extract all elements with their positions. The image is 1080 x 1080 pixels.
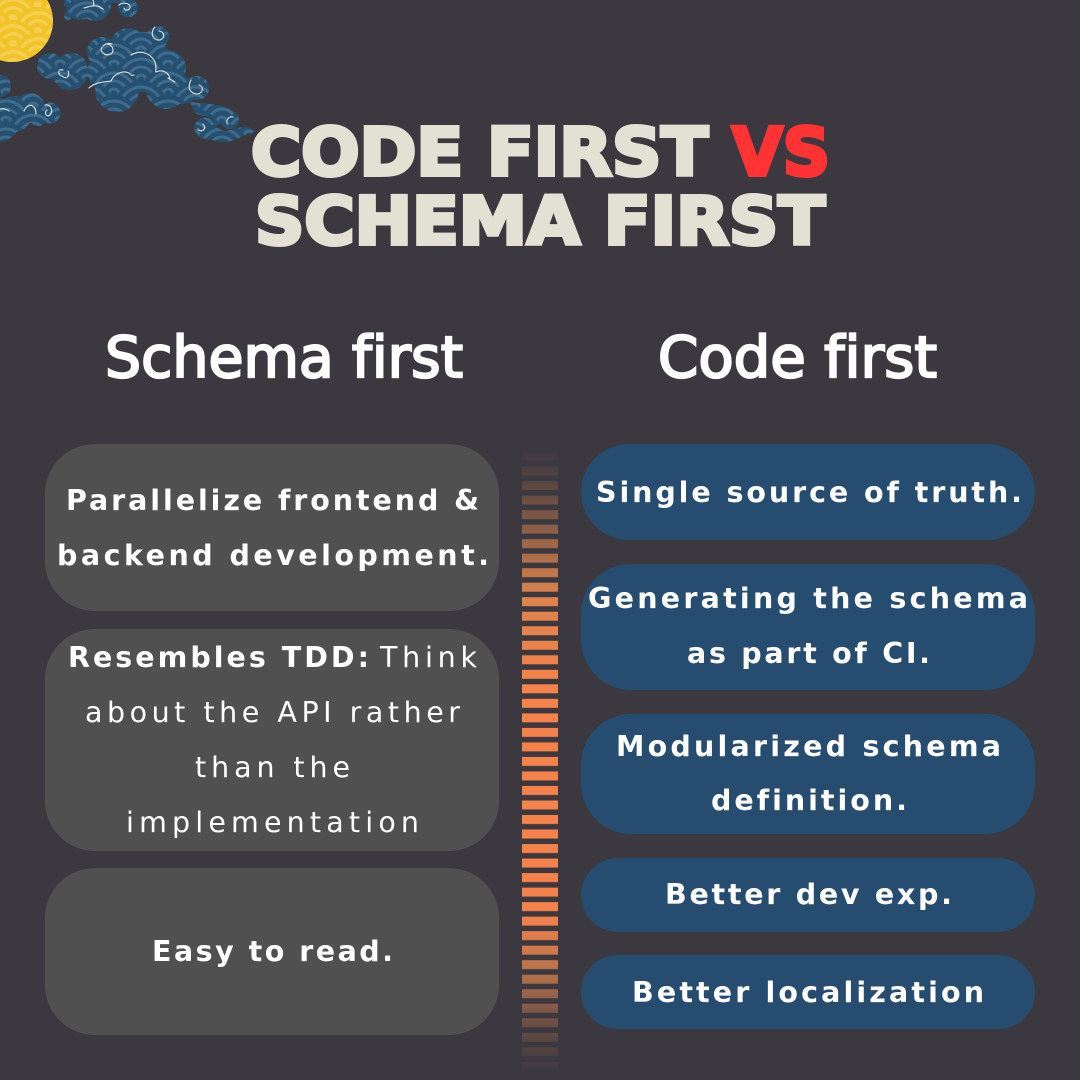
pill: easy to read xyxy=(45,868,499,1035)
title line 2: SCHEMA FIRST xyxy=(255,183,825,260)
pill: better dev exp xyxy=(581,858,1035,932)
pill: resembles TDD: Resembles TDD: xyxy=(68,641,369,674)
pill: single source of truth: Single source of truth. xyxy=(596,476,1022,509)
divider: fading orange bars xyxy=(522,437,558,1077)
pill: resembles TDD: about the API rather xyxy=(85,696,460,729)
icon: yellow moon xyxy=(0,0,53,62)
icon: main cloud xyxy=(37,26,256,142)
pill: better localization xyxy=(581,955,1035,1029)
heading: schema first: Schema first xyxy=(105,325,463,391)
title accent: VS: VS xyxy=(732,114,830,191)
pill: modularized schema xyxy=(581,714,1035,834)
pill: generating the schema: as part of CI. xyxy=(687,637,930,670)
pill: resembles TDD: implementation xyxy=(126,806,419,839)
pill: resembles TDD: Think xyxy=(379,641,477,674)
pill: better dev exp: Better dev exp. xyxy=(665,878,952,911)
pill: easy to read: Easy to read. xyxy=(152,935,393,968)
pill: resembles TDD: than the xyxy=(195,751,350,784)
pill: parallelize: Parallelize frontend & xyxy=(66,484,479,517)
icon: top cloud xyxy=(64,0,138,21)
pill: parallelize xyxy=(45,444,499,611)
pill: single source of truth xyxy=(581,444,1035,540)
pill: generating the schema xyxy=(581,564,1035,690)
icon: left cloud xyxy=(0,75,60,142)
title line 1: CODE FIRST xyxy=(251,114,708,191)
panel: schema first items xyxy=(45,444,499,1035)
title xyxy=(251,114,830,260)
pill: parallelize: backend development. xyxy=(57,539,489,572)
panel: code first items xyxy=(581,444,1035,1029)
pill: modularized schema: definition. xyxy=(711,784,907,817)
pill: resembles TDD xyxy=(45,629,499,851)
pill: modularized schema: Modularized schema xyxy=(616,730,1001,763)
clouds decoration xyxy=(0,0,256,142)
pill: better localization: Better localization xyxy=(632,976,984,1009)
pill: generating the schema: Generating the schema xyxy=(588,582,1028,615)
heading: code first: Code first xyxy=(658,325,937,391)
